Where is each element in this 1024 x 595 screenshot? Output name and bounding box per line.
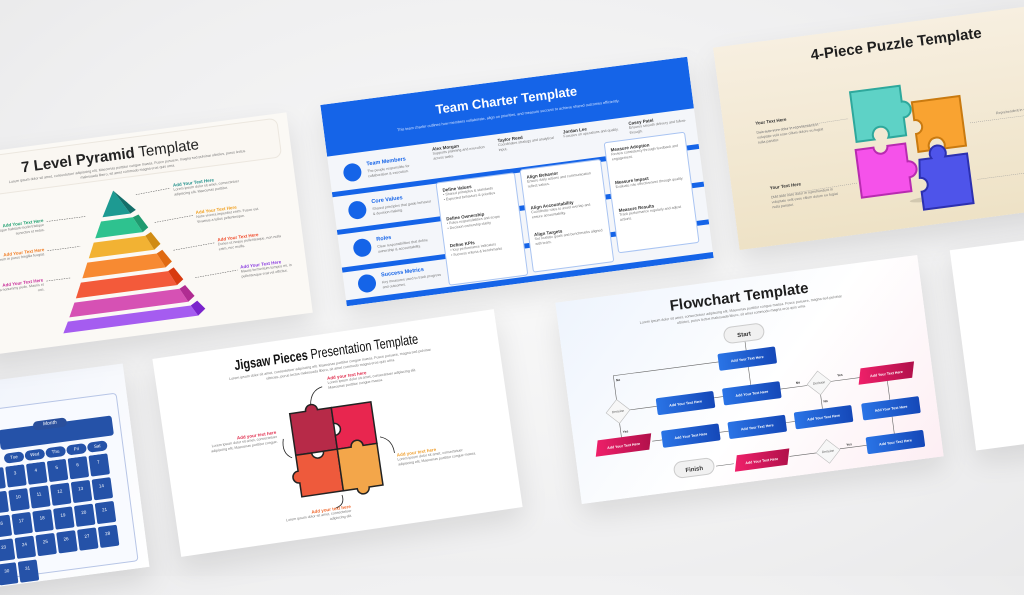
row: core values: Shared principles that guide behavior & decision making. [372, 199, 431, 216]
calendar frame [0, 392, 139, 586]
label: right 2: Nunc viverra imperdiet enim. Fusce est. Vivamus a tellus pellentesque. [196, 206, 259, 223]
flowchart diagram: Yes [846, 442, 852, 447]
charter header: Team Charter Template [434, 83, 578, 117]
calendar grid: 31 [25, 565, 31, 571]
calendar grid: 19 [61, 512, 67, 518]
row: team members: Team Members [366, 156, 406, 167]
flowchart diagram: Decision [812, 380, 825, 386]
flowchart diagram: Add Your Text Here [740, 424, 774, 432]
calendar grid: 24 [22, 541, 28, 547]
jigsaw label left: Lorem ipsum dolor sit amet, consectetuer adipiscing elit. Maecenas porttitor congue. [211, 435, 278, 454]
flowchart diagram: Decision [611, 409, 624, 415]
flowchart diagram: Add Your Text Here [745, 457, 778, 466]
cards column 1: • Expected behaviors & priorities [443, 191, 495, 202]
cards column 2: Set realistic goals and benchmarks aligned with team. [534, 228, 602, 246]
names row: Alex Morgan [431, 143, 459, 152]
cards column 1: • Shared principles & standards [442, 186, 493, 197]
cards column 2 [519, 159, 614, 273]
jigsaw label left: Add your text here [236, 430, 277, 441]
names row: Ensures smooth delivery and follow-through. [628, 118, 686, 135]
calendar month bar: Month [43, 419, 58, 427]
cards column 3: Review consistency through feedback and engagement. [611, 144, 678, 161]
start [723, 323, 764, 344]
jigsaw label right: Add your text here [396, 447, 436, 458]
slide: 4-piece puzzle [713, 6, 1024, 250]
cards column 3: Evaluate role effectiveness through quality. [615, 176, 683, 189]
cards column 2: Align Behavior [526, 171, 558, 180]
jigsaw subtitle: Lorem ipsum dolor sit amet, consectetuer adipiscing elit. Maecenas porttitor congue massa. Fusce posuere, magna sed pulvinar ultricies, purus lectus malesuada libero, sit amet commodo magna eros quis urna. [229, 348, 431, 381]
flowchart diagram: Add Your Text Here [607, 442, 640, 450]
row: team members [343, 156, 410, 182]
flowchart diagram: No [615, 378, 620, 383]
names row: Jordan Lee [562, 126, 587, 135]
label: right 4: Add Your Text Here [240, 259, 281, 269]
cards column 1: Define Values [442, 184, 471, 193]
names row: Casey Patel [628, 118, 653, 126]
calendar grid: 3 [14, 470, 18, 475]
slide: 7 level pyramid [0, 112, 312, 355]
cards column 1: Define KPIs [449, 240, 475, 248]
calendar grid: 7 [97, 459, 101, 464]
cards column 2: Align Targets [533, 229, 562, 237]
flowchart diagram [596, 323, 925, 478]
flowchart diagram: No [823, 399, 828, 404]
puzzle label left 1: Duis aute irure dolor in reprehenderit in voluptate velit esse cillum dolore eu fugiat nulla pariatur. [756, 123, 823, 145]
calendar grid [0, 440, 120, 586]
cards column 2: Coordinate roles to avoid overlap and ensure accountability. [530, 203, 590, 219]
flowchart subtitle: Lorem ipsum dolor sit amet, consectetuer adipiscing elit. Maecenas porttitor congue massa. Fusce posuere, magna sed pulvinar ultricies, purus lectus malesuada libero, sit amet commodo magna eros quis urna. [639, 295, 842, 325]
flowchart diagram: Add Your Text Here [735, 390, 768, 398]
cards column 3 [603, 132, 699, 253]
cards column 1: Define Ownership [446, 212, 484, 222]
calendar grid: 6 [76, 462, 80, 467]
row: success metrics: Key measures used to track progress and outcomes. [381, 273, 441, 289]
flowchart diagram: Yes [837, 373, 843, 378]
slide: jigsaw [152, 310, 523, 557]
calendar grid: 28 [105, 530, 111, 536]
row stripes [331, 144, 699, 197]
names row [431, 118, 686, 161]
calendar grid: 27 [85, 533, 91, 539]
puzzle label left 2: Your Text Here [769, 182, 801, 191]
jigsaw label top: Lorem ipsum dolor sit amet, consectetuer adipiscing elit. Maecenas porttitor congue massa. [327, 368, 416, 390]
calendar grid: 10 [16, 494, 22, 499]
calendar month bar [0, 415, 114, 450]
calendar grid: 14 [99, 483, 105, 488]
cards column 1: • Success criteria & benchmarks [450, 247, 502, 257]
flowchart diagram: No [795, 381, 800, 385]
names row: Supports planning and execution across tasks. [432, 145, 484, 161]
pyramid chart [46, 188, 238, 334]
label: right 3: Add Your Text Here [217, 232, 258, 242]
jigsaw graphic [282, 386, 395, 508]
calendar grid: Wed [30, 451, 40, 457]
puzzle title: 4-Piece Puzzle Template [810, 25, 983, 64]
label: right 2: Add Your Text Here [195, 204, 237, 215]
charter header [320, 57, 694, 157]
finish [673, 458, 715, 479]
flowchart diagram: Add Your Text Here [807, 414, 840, 422]
slide: team charter [320, 57, 713, 306]
slide: flowchart [555, 255, 943, 504]
row: core values: Core Values [371, 195, 403, 205]
slide: calendar [0, 363, 150, 595]
flowchart diagram: Add Your Text Here [874, 405, 907, 413]
cards column 3: Measure Results [618, 203, 654, 213]
cards column 2: Ensure daily actions and communication reflect values. [526, 171, 591, 189]
label: left 3: Add Your Text Here [2, 277, 43, 287]
jigsaw label right: Lorem ipsum dolor sit amet, consectetuer adipiscing elit. Maecenas porttitor congue massa. [397, 449, 476, 467]
calendar grid: 18 [40, 515, 46, 520]
calendar grid: 12 [57, 488, 64, 494]
flowchart title: Flowchart Template [668, 280, 809, 315]
calendar grid: 23 [1, 544, 7, 550]
flowchart diagram: Add Your Text Here [869, 370, 903, 379]
label: left 1: Add Your Text Here [2, 217, 43, 228]
label: right 4: Mauris fermentum tempus mi, in pellentesque erat vel efficitur. [240, 262, 292, 278]
flowchart diagram: Decision [821, 449, 834, 454]
row: roles [353, 235, 428, 257]
calendar grid: Sat [94, 443, 101, 449]
cards column 1: • Key performance indicators [450, 242, 496, 252]
cards column 1 [435, 172, 528, 286]
jigsaw title: Jigsaw Pieces Presentation Template [233, 331, 419, 374]
calendar grid: 4 [35, 467, 38, 473]
flowchart diagram: Start [737, 332, 751, 339]
label: right 1: Lorem ipsum dolor sit amet, consectetuer adipiscing elit. Maecenas porttitor. [173, 179, 239, 196]
slide: right partial [950, 221, 1024, 450]
calendar grid: 5 [56, 465, 59, 470]
calendar grid: 17 [19, 517, 25, 523]
names row: Taylor Reed [497, 135, 523, 143]
row: core values [348, 195, 431, 220]
names row: Focuses on operations and quality. [563, 127, 618, 139]
row: roles: Clear responsibilities that define ownership & accountability. [377, 238, 428, 254]
puzzle label left 1: Your Text Here [755, 117, 787, 126]
calendar grid: 26 [64, 536, 70, 541]
label: right 1: Add Your Text Here [172, 177, 214, 187]
cards column 3: Measure Adoption [610, 142, 649, 152]
label: left 2: Add Your Text Here [3, 247, 44, 257]
charter header: This team charter outlines how members collaborate, align on priorities, and measure success to achieve shared outcomes efficiently. [397, 99, 619, 132]
pyramid title: 7 Level Pyramid Template [20, 136, 200, 176]
calendar grid: 20 [81, 509, 87, 515]
calendar grid: 13 [78, 485, 84, 491]
jigsaw label top: Add your text here [327, 371, 367, 381]
calendar grid: Fri [74, 446, 80, 451]
row: team members: The people responsible for collaboration & execution. [367, 164, 409, 178]
calendar grid: 21 [102, 506, 108, 512]
flowchart diagram: Add Your Text Here [669, 400, 702, 408]
row: success metrics [358, 267, 441, 292]
cards column 1: • Roles responsibilities and scope [446, 215, 500, 225]
cards column 3: Measure Impact [614, 176, 649, 185]
label: right 3: Donec ut neque pellentesque, non nulla enim, nec mollis. [217, 234, 281, 251]
header box [0, 117, 282, 200]
jigsaw label bottom: Lorem ipsum dolor sit amet, consectetuer adipiscing elit. [286, 509, 352, 523]
flowchart diagram: Yes [622, 430, 628, 434]
calendar grid: 30 [4, 568, 10, 573]
cards column 3: Track performance regularly and adjust actions. [619, 205, 681, 222]
row: roles: Roles [376, 235, 391, 243]
puzzle label left 2: Duis aute irure dolor in reprehenderit in voluptate velit esse cillum dolore eu fugiat nulla pariatur. [771, 187, 838, 209]
puzzle graphic [760, 84, 1024, 211]
flowchart diagram: Add Your Text Here [730, 355, 764, 364]
calendar grid: 25 [43, 538, 49, 544]
row: success metrics: Success Metrics [380, 267, 424, 279]
cards column 2: Align Accountability [530, 200, 573, 210]
cards column 1: • Decision ownership clarity [447, 221, 491, 230]
jigsaw label bottom: Add your text here [311, 504, 351, 515]
calendar grid: Thu [52, 448, 60, 454]
flowchart diagram: Finish [685, 466, 703, 474]
names row: Coordinates strategy and analytical input. [497, 136, 554, 152]
calendar grid: 11 [37, 491, 43, 497]
pyramid subtitle: Lorem ipsum dolor sit amet, consectetuer adipiscing elit. Maecenas porttitor congue massa. Fusce posuere, magna sed pulvinar ultricies, purus lectus malesuada libero, sit amet commodo magna eros quis urna. [8, 149, 245, 184]
flowchart diagram: Add Your Text Here [674, 432, 707, 441]
flowchart diagram: Add Your Text Here [878, 439, 912, 447]
calendar grid: Tue [10, 454, 18, 460]
